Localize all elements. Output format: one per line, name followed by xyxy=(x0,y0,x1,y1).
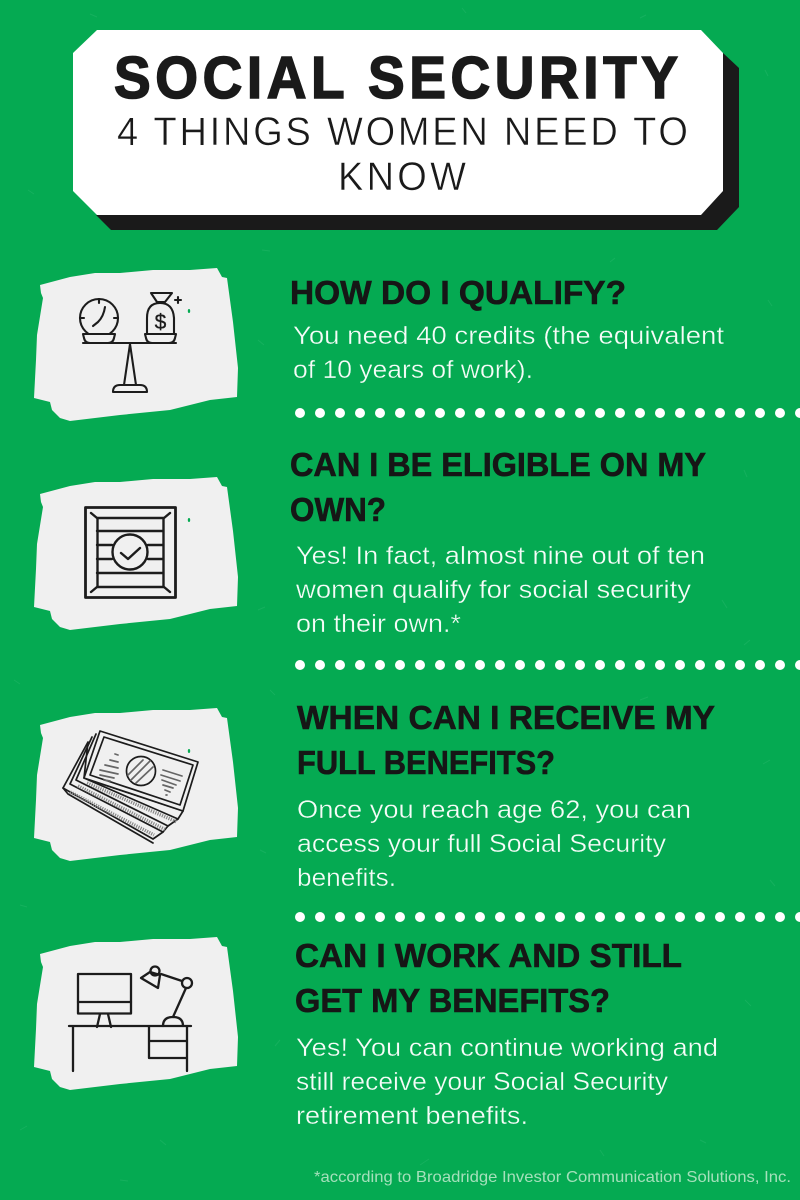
icon: desk with monitor and lamp xyxy=(69,966,192,1071)
body text: Once you reach age 62, you can xyxy=(297,796,691,824)
title: SOCIAL SECURITY xyxy=(114,45,678,111)
icon panel: crate xyxy=(34,477,238,630)
subtitle: 4 THINGS WOMEN NEED TO xyxy=(117,110,688,154)
heading: CAN I BE ELIGIBLE ON MY xyxy=(290,446,706,483)
heading xyxy=(295,937,682,1019)
body text xyxy=(295,542,705,638)
speck xyxy=(188,749,190,753)
body text: Yes! In fact, almost nine out of ten xyxy=(296,542,705,570)
body text: retirement benefits. xyxy=(296,1102,528,1130)
panel: work and benefits xyxy=(34,937,718,1130)
heading: GET MY BENEFITS? xyxy=(295,982,610,1019)
body text xyxy=(293,322,724,384)
heading: WHEN CAN I RECEIVE MY xyxy=(297,699,715,736)
heading: FULL BENEFITS? xyxy=(297,744,555,781)
icon: stack of banknotes xyxy=(63,731,198,843)
subtitle: KNOW xyxy=(338,155,466,199)
body text: women qualify for social security xyxy=(295,576,692,604)
panel: how do I qualify xyxy=(34,268,724,421)
icon panel: desk xyxy=(34,937,238,1090)
footnote: *according to Broadridge Investor Communication Solutions, Inc. xyxy=(314,1169,791,1186)
speck xyxy=(188,518,190,522)
heading xyxy=(297,699,715,781)
body text: on their own.* xyxy=(296,610,461,638)
banner panel xyxy=(73,30,723,215)
subtitle xyxy=(117,110,688,199)
heading: OWN? xyxy=(290,491,386,528)
body text: still receive your Social Security xyxy=(296,1068,669,1096)
body text: You need 40 credits (the equivalent xyxy=(293,322,724,350)
icon: clock and money on scale xyxy=(80,293,181,392)
icon: crate with check mark xyxy=(86,508,176,598)
body text xyxy=(296,1034,718,1130)
panel: full benefits xyxy=(34,699,715,892)
icon panel: money xyxy=(34,708,238,861)
heading: HOW DO I QUALIFY? xyxy=(290,274,626,311)
heading: CAN I WORK AND STILL xyxy=(295,937,682,974)
body text: of 10 years of work). xyxy=(293,356,533,384)
body text: Yes! You can continue working and xyxy=(296,1034,718,1062)
icon: clock and money on scale: $ xyxy=(155,311,167,334)
banner shadow xyxy=(96,53,739,230)
icon panel: scale xyxy=(34,268,238,421)
body text: access your full Social Security xyxy=(297,830,667,858)
title banner xyxy=(73,30,739,230)
panel: eligible on my own xyxy=(34,446,706,638)
body text xyxy=(297,796,691,892)
speck xyxy=(188,309,190,313)
heading xyxy=(290,446,706,528)
body text: benefits. xyxy=(297,864,396,892)
